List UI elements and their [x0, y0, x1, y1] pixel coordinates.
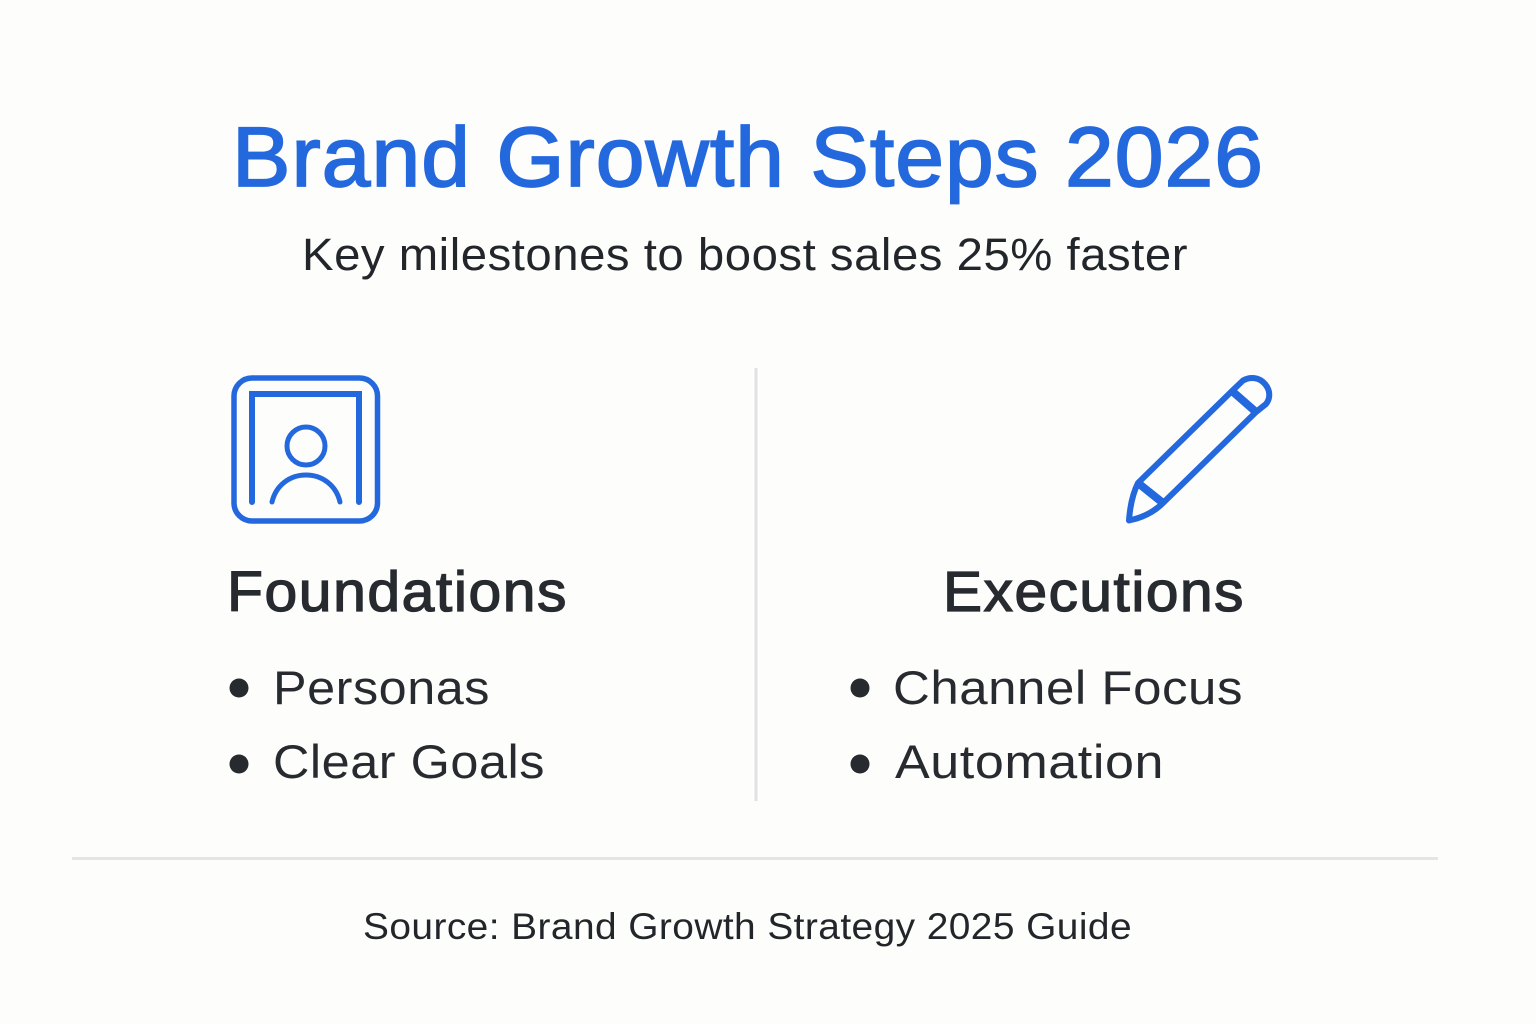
subtitle: Key milestones to boost sales 25% faster — [302, 229, 1188, 280]
vertical divider — [754, 368, 758, 801]
icon: pencil — [1129, 378, 1269, 520]
horizontal divider — [72, 857, 1438, 860]
list item: personas: Personas — [273, 661, 490, 714]
title: Brand Growth Steps 2026 — [232, 110, 1264, 204]
heading: foundations: Foundations — [227, 560, 568, 624]
icon: persona portrait — [234, 378, 378, 521]
list item: channel focus: Channel Focus — [893, 661, 1243, 714]
panel: foundations — [227, 378, 568, 788]
source note: Source: Brand Growth Strategy 2025 Guide — [363, 906, 1132, 947]
heading: executions: Executions — [943, 560, 1245, 624]
list item: automation: Automation — [895, 735, 1164, 788]
panel: executions — [850, 378, 1269, 788]
list item: clear goals: Clear Goals — [273, 735, 545, 788]
